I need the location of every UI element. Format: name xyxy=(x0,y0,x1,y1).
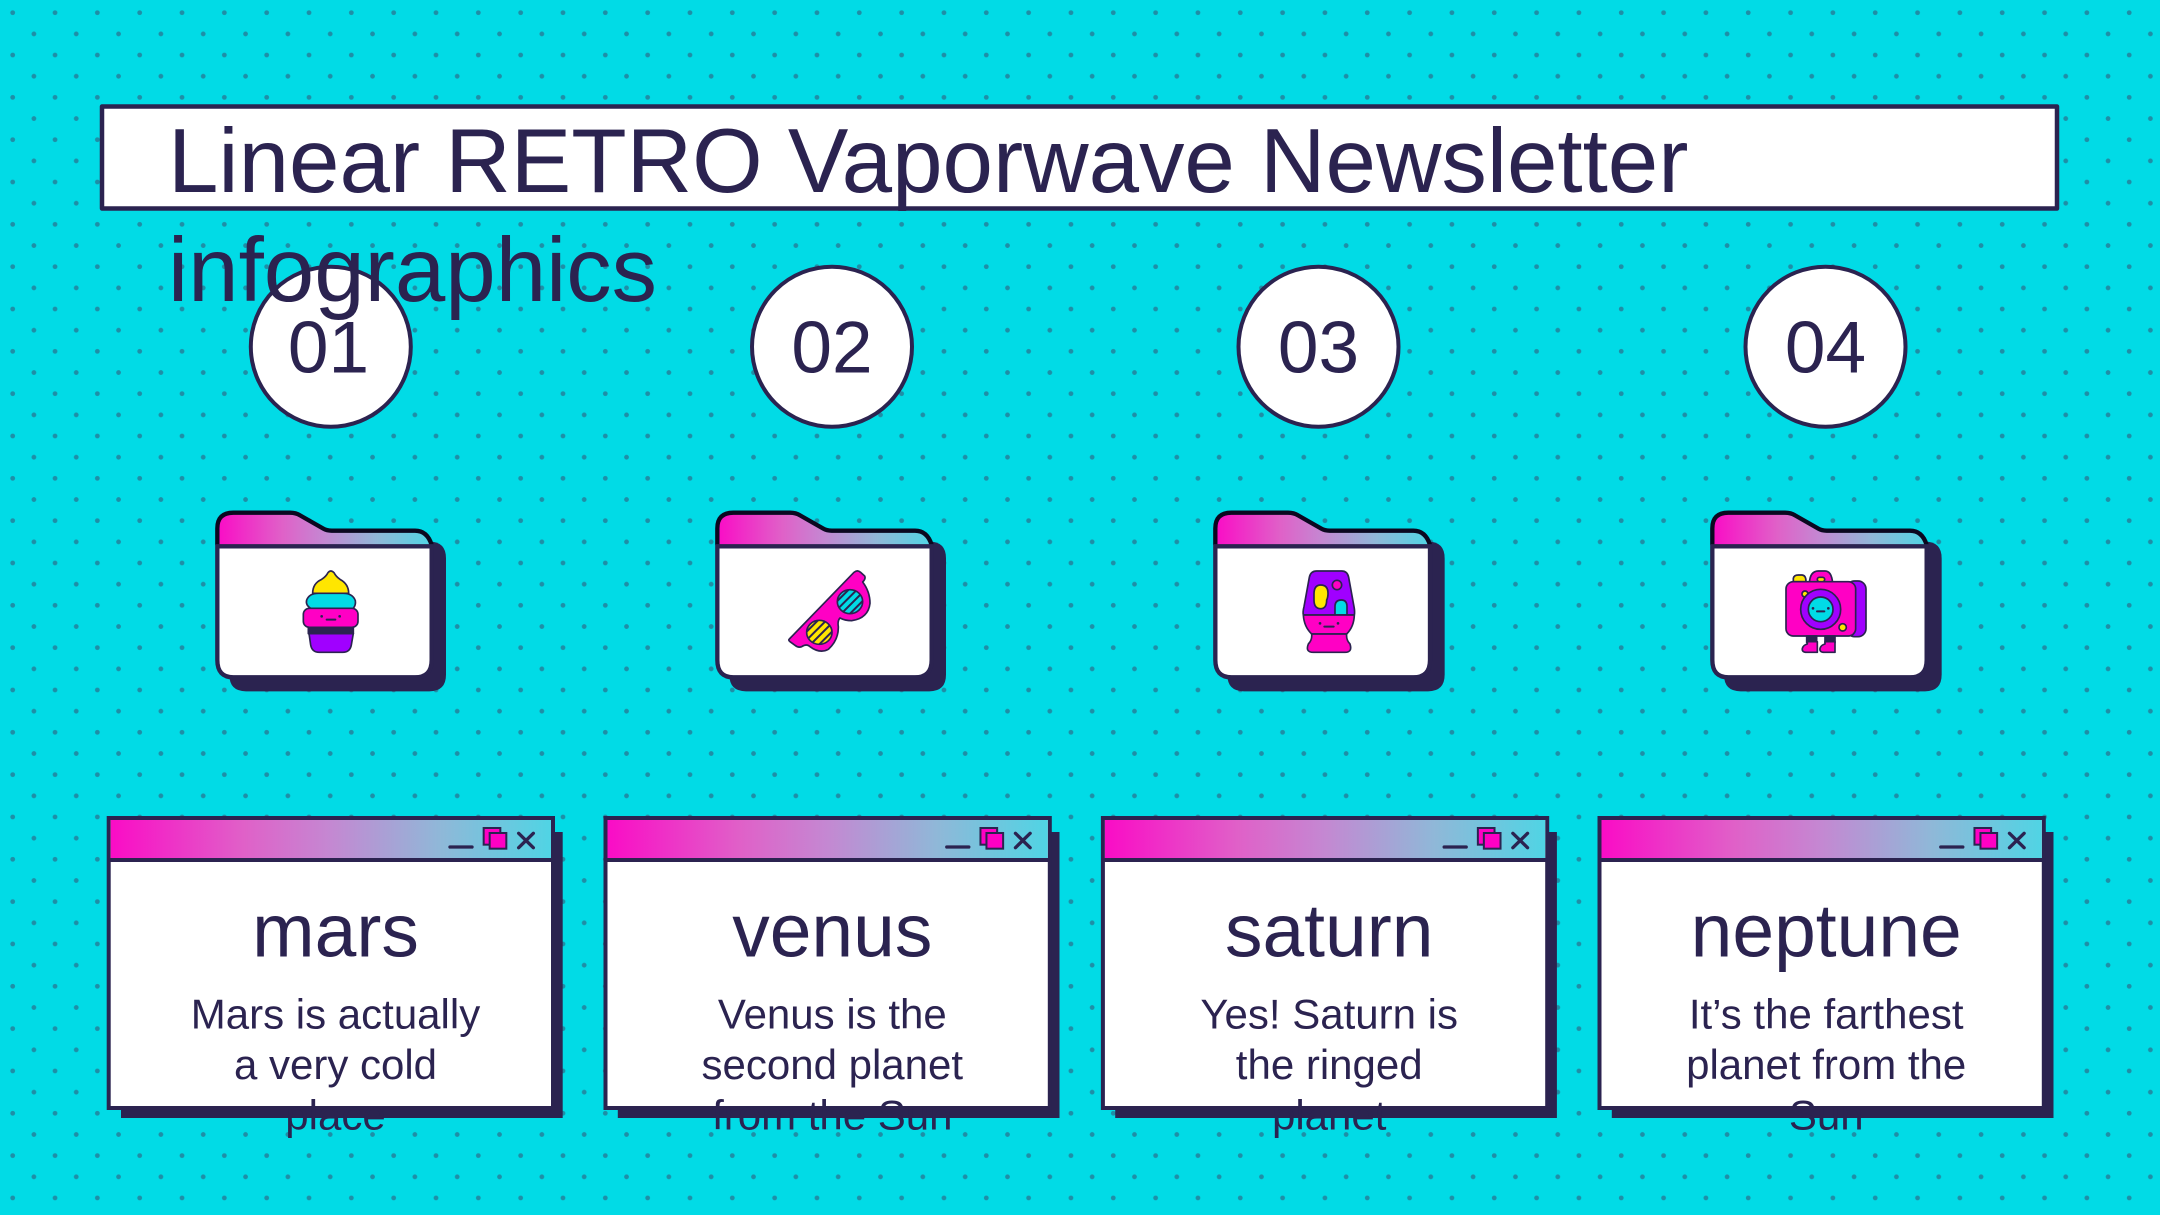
number circle 04: 04 xyxy=(1785,308,1866,388)
text: mars description: a very cold xyxy=(234,1041,437,1088)
window controls xyxy=(450,828,533,849)
number circle 03: 03 xyxy=(1278,308,1359,388)
folder 4: camera xyxy=(1712,513,1942,691)
title: infographics xyxy=(168,220,657,321)
number circle 03 xyxy=(1238,267,1398,427)
text: neptune description: It’s the farthest xyxy=(1689,990,1964,1038)
text: neptune description: Sun xyxy=(1789,1092,1864,1138)
folder 1: cupcake xyxy=(217,513,446,691)
icon: camera xyxy=(1786,571,1866,652)
text: neptune description: planet from the xyxy=(1686,1041,1966,1088)
icon: sunglasses xyxy=(789,571,870,651)
title bar xyxy=(102,106,2057,208)
panel: venus window xyxy=(606,818,1060,1138)
number circle 02: 02 xyxy=(791,308,873,388)
number circle 01 xyxy=(251,267,411,427)
heading: venus: venus xyxy=(732,888,932,972)
heading: saturn: saturn xyxy=(1225,888,1433,972)
number circle 04 xyxy=(1746,267,1906,427)
title: Linear RETRO Vaporwave Newsletter xyxy=(168,111,1688,212)
text: saturn description: Yes! Saturn is xyxy=(1200,990,1458,1038)
heading: mars: mars xyxy=(252,888,419,972)
text: saturn description: the ringed xyxy=(1236,1041,1423,1088)
folder 2: sunglasses xyxy=(717,513,946,691)
window controls xyxy=(1444,828,1528,849)
window controls xyxy=(947,828,1030,849)
window controls xyxy=(1941,828,2024,849)
text: mars description: place xyxy=(285,1092,386,1138)
number circle 02 xyxy=(752,267,912,427)
icon: lava lamp xyxy=(1303,571,1355,652)
text: saturn description: planet xyxy=(1272,1092,1387,1138)
text: mars description: Mars is actually xyxy=(191,990,480,1038)
text: venus description: Venus is the xyxy=(718,990,947,1038)
panel: mars window xyxy=(109,818,563,1138)
text: venus description: from the Sun xyxy=(712,1092,953,1138)
panel: saturn window xyxy=(1103,818,1557,1138)
icon: cupcake xyxy=(303,571,358,652)
folder 3: lava lamp xyxy=(1215,513,1445,691)
number circle 01: 01 xyxy=(288,308,369,388)
text: venus description: second planet xyxy=(702,1041,963,1088)
heading: neptune: neptune xyxy=(1691,888,1962,972)
panel: neptune window xyxy=(1600,818,2054,1138)
